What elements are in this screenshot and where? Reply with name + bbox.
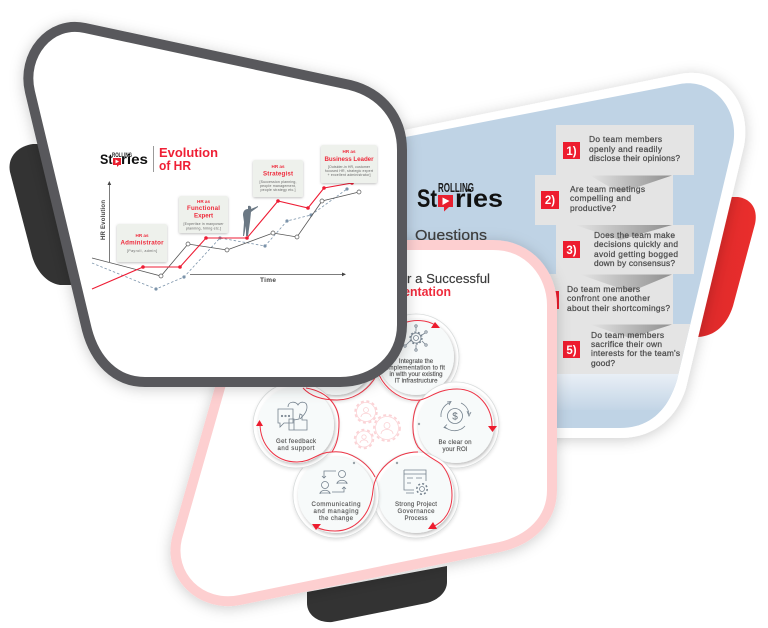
icon: slide and gear (404, 470, 427, 494)
logo divider (153, 146, 154, 172)
step: integrate the implementation: implementation to fit (387, 364, 445, 372)
title: Evolution of HR (159, 145, 218, 173)
step: communicating and managing the change (293, 452, 379, 538)
step: strong project governance: Strong Project (395, 501, 437, 508)
chart axes (101, 181, 346, 284)
step: get feedback and support: and support (278, 445, 315, 452)
title: Evolution of HR: of HR (159, 158, 192, 173)
blue panel frame (380, 73, 745, 438)
card 5: good? (591, 358, 615, 368)
red line (92, 181, 354, 289)
step: be clear on ROI (413, 382, 499, 468)
box: business leader: [Outsider-in HR, customer (328, 165, 371, 169)
step: strong project governance: Process (404, 515, 428, 522)
red connector arcs (260, 321, 492, 531)
card 2 (535, 175, 673, 225)
icon: chat, heart, thumb (278, 402, 307, 430)
heading: successful implementation (360, 271, 490, 299)
card 1 (556, 125, 694, 175)
box: functional expert: planning, hiring etc.] (186, 226, 221, 230)
card 1: Do team members (589, 134, 662, 144)
box: functional expert: [Expertise in manpower (184, 222, 224, 226)
icon: dollar cycle (441, 402, 471, 431)
pink panel frame (175, 245, 552, 601)
box: business leader (321, 145, 377, 183)
chart axes: HR Evolution (101, 200, 107, 240)
step: top-left hidden node (293, 314, 379, 400)
logo: Rolling Stories (HR panel): St (100, 152, 113, 167)
step: be clear on ROI: $ (452, 412, 458, 422)
step: strong project governance (373, 452, 459, 538)
step: get feedback and support: Get feedback (276, 438, 317, 445)
card 4 (541, 274, 673, 324)
icon: gear network (404, 325, 427, 351)
red arrowheads (256, 322, 497, 530)
logo: Rolling Stories (HR panel): ROLLING (112, 152, 132, 159)
card 5: sacrifice their own (591, 339, 662, 349)
panel: implementation wheel (175, 245, 552, 601)
logo: Rolling Stories (blue panel): ROLLING (438, 181, 474, 195)
icon: two people exchange (320, 470, 347, 494)
card 3 (556, 225, 694, 274)
step: get feedback and support (253, 382, 339, 468)
box: strategist: HR as (272, 164, 285, 169)
box: strategist: Strategist (263, 170, 293, 178)
step: integrate the implementation (373, 314, 459, 400)
card 3: 3) (566, 245, 577, 257)
card 5: 5) (566, 345, 577, 357)
red tab behind blue panel (680, 197, 756, 337)
card 3: avoid getting bogged (594, 249, 678, 259)
black tab under pink panel (307, 566, 447, 622)
card 2: Are team meetings (570, 184, 645, 194)
blue panel fill (380, 83, 734, 428)
card 1: openly and readily (589, 144, 663, 154)
box: business leader: focused HR, strategic expert (325, 169, 373, 173)
center gears (355, 401, 400, 448)
box: business leader: HR as (342, 149, 356, 154)
question cards (535, 125, 696, 410)
step: be clear on ROI: Be clear on (438, 439, 472, 446)
box: business leader: Business Leader (324, 156, 374, 163)
card 3: Does the team make (594, 230, 675, 240)
step: communicating and managing the change: Communicating (312, 501, 360, 508)
box: functional expert: HR as (197, 199, 210, 204)
logo: Rolling Stories (blue panel): St (417, 185, 438, 213)
grey line (92, 190, 361, 278)
step: communicating and managing the change: and managing (314, 508, 358, 515)
box: functional expert: Expert (194, 212, 213, 220)
panel: evolution of HR (28, 27, 402, 382)
heading: successful implementation: for a Successful (396, 271, 490, 286)
box: administrator (117, 224, 167, 262)
card 5: Do team members (591, 330, 664, 340)
card 2: productive? (570, 203, 616, 213)
box: functional expert (179, 196, 228, 233)
title: Evolution of HR: Evolution (159, 145, 218, 160)
card 2: 2) (545, 195, 555, 207)
card 1: 1) (566, 146, 577, 158)
card 1: disclose their opinions? (589, 153, 680, 163)
dashed blue line (92, 187, 349, 291)
step: strong project governance: Governance (398, 508, 435, 515)
box: functional expert: Functional (187, 205, 220, 212)
box: business leader: + excellent administrator] (328, 173, 371, 177)
box: strategist: [Succession planning, (260, 180, 297, 184)
dark tab left of HR panel (10, 144, 85, 285)
grey start dots (353, 423, 420, 464)
step: be clear on ROI: your ROI (442, 446, 468, 453)
logo: Rolling Stories (HR panel) (100, 152, 148, 167)
panel: team questions (380, 73, 745, 438)
logo: Rolling Stories (HR panel): ries (121, 152, 148, 167)
box: administrator: HR as (136, 233, 149, 238)
box: strategist: people strategy etc.] (260, 188, 296, 192)
card 2: compelling and (570, 193, 631, 203)
card 3: decisions quickly and (594, 239, 678, 249)
logo: Rolling Stories (blue panel): ries (455, 185, 503, 213)
card 4: about their shortcomings? (567, 303, 670, 313)
step: communicating and managing the change: the change (319, 515, 354, 522)
card 3: down by consensus? (594, 258, 675, 268)
card 5 (556, 324, 696, 374)
box: strategist: people management, (260, 184, 296, 188)
logo: Rolling Stories (blue panel) (417, 181, 503, 213)
heading: successful implementation: Implementation (360, 284, 451, 299)
box: administrator: Administrator (120, 240, 164, 246)
card 4: Do team members (567, 284, 640, 294)
pale floor reflection (557, 374, 678, 410)
card 4: confront one another (567, 293, 650, 303)
chart axes: Time (260, 277, 276, 284)
HR panel frame (28, 27, 402, 382)
heading: Questions: Questions (415, 227, 487, 244)
icon: person pointing (243, 206, 258, 236)
step: integrate the implementation: in with your existing (390, 371, 442, 378)
card 5: interests for the team's (591, 348, 680, 358)
step: integrate the implementation: IT infrastructure (394, 378, 438, 384)
box: strategist (253, 160, 303, 197)
step: integrate the implementation: Integrate the (399, 358, 434, 365)
box: administrator: [Payroll, admin] (127, 249, 157, 253)
